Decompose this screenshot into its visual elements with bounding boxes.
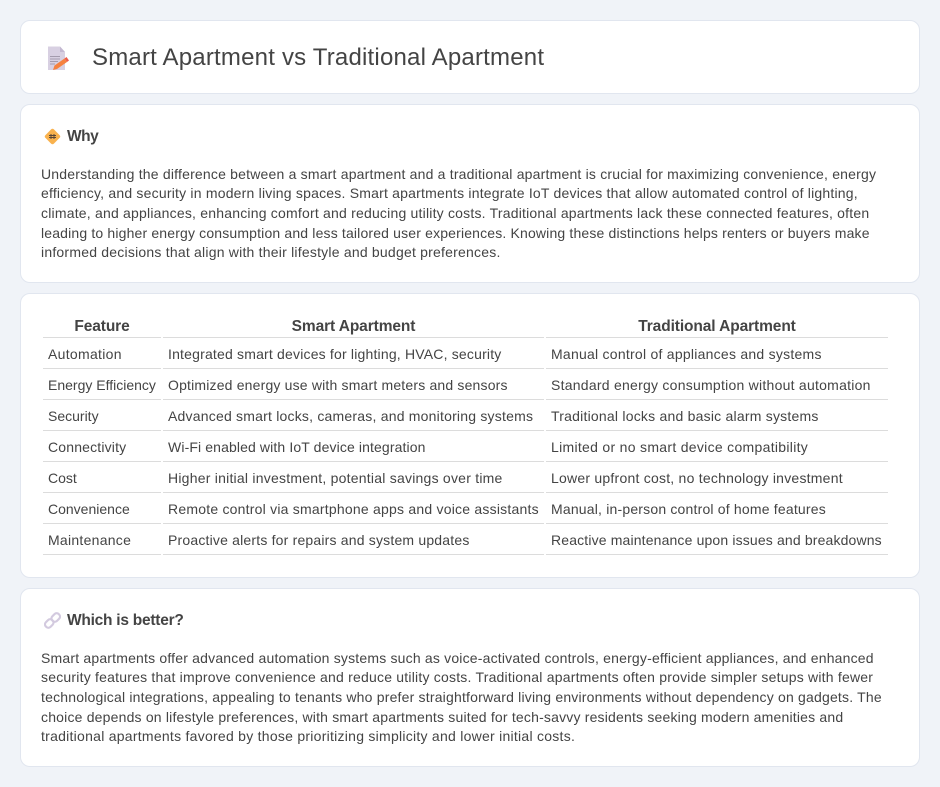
panel: comparison table	[20, 293, 920, 578]
panel: comparison table: Higher initial investment, potential savings over time	[168, 470, 503, 486]
icon: diamond sign	[44, 128, 60, 144]
heading: why: Why	[67, 128, 98, 145]
panel: why: leading to higher energy consumption and less tailored user experiences. Knowing these distinctions helps renters or buyers make	[41, 225, 870, 241]
panel: comparison table: Standard energy consumption without automation	[551, 377, 871, 393]
panel: comparison table: Traditional locks and basic alarm systems	[551, 408, 819, 424]
panel: why: climate, and appliances, enhancing comfort and reducing utility costs. Traditional apartments lack these connected features, often	[41, 205, 869, 221]
row: convenience	[43, 501, 888, 524]
panel: comparison table: Remote control via smartphone apps and voice assistants	[168, 501, 539, 517]
panel: comparison table: Reactive maintenance upon issues and breakdowns	[551, 532, 882, 548]
row: cost	[43, 470, 888, 493]
row: automation	[43, 346, 888, 369]
panel: comparison table: Wi-Fi enabled with IoT device integration	[168, 439, 426, 455]
panel: which is better	[20, 588, 920, 767]
icon: link	[44, 612, 61, 629]
table header	[43, 318, 888, 338]
panel: comparison table: Energy Efficiency	[48, 377, 156, 393]
panel: comparison table: Advanced smart locks, cameras, and monitoring systems	[168, 408, 533, 424]
panel: comparison table: Feature	[74, 318, 130, 335]
panel: comparison table: Traditional Apartment	[638, 318, 796, 335]
panel: comparison table: Cost	[48, 470, 77, 486]
panel: title	[20, 20, 920, 94]
icon: document with pencil	[48, 46, 69, 70]
panel: which is better: technological integrations, appealing to tenants who prefer straightforward living environments without dependency on gadgets. The	[41, 689, 882, 705]
heading: which is better: Which is better?	[67, 612, 184, 629]
heading: title: Smart Apartment vs Traditional Apartment	[92, 44, 544, 71]
panel: which is better: Smart apartments offer advanced automation systems such as voice-activated controls, energy-efficient appliances, and enhanced	[41, 650, 874, 666]
panel: which is better: security features that improve convenience and reduce utility costs. Traditional apartments often provide simpler setups with fewer	[41, 669, 873, 685]
panel: comparison table: Convenience	[48, 501, 130, 517]
panel: why: Understanding the difference between a smart apartment and a traditional apartment is crucial for maximizing convenience, energy	[41, 166, 876, 182]
row: maintenance	[43, 532, 888, 555]
panel: comparison table: Manual control of appliances and systems	[551, 346, 822, 362]
text: why paragraph	[41, 166, 876, 260]
panel: comparison table: Smart Apartment	[292, 318, 415, 335]
panel: why	[20, 104, 920, 283]
row: connectivity	[43, 439, 888, 462]
panel: comparison table: Lower upfront cost, no technology investment	[551, 470, 843, 486]
panel: comparison table: Maintenance	[48, 532, 131, 548]
panel: why: informed decisions that align with their lifestyle and budget preferences.	[41, 244, 501, 260]
panel: comparison table: Manual, in-person control of home features	[551, 501, 826, 517]
text: which is better paragraph	[41, 650, 882, 744]
panel: comparison table: Integrated smart devices for lighting, HVAC, security	[168, 346, 502, 362]
panel: why: efficiency, and security in modern living spaces. Smart apartments integrate IoT devices that allow automated control of lighting,	[41, 185, 858, 201]
row: energy efficiency	[43, 377, 888, 400]
panel: comparison table: Connectivity	[48, 439, 126, 455]
panel: comparison table: Limited or no smart device compatibility	[551, 439, 808, 455]
panel: which is better: traditional apartments favored by those prioritizing simplicity and lower initial costs.	[41, 728, 575, 744]
panel: comparison table: Security	[48, 408, 99, 424]
panel: comparison table: Automation	[48, 346, 122, 362]
panel: which is better: choice depends on lifestyle preferences, with smart apartments suited for tech-savvy residents seeking modern amenities and	[41, 709, 843, 725]
panel: comparison table: Optimized energy use with smart meters and sensors	[168, 377, 508, 393]
row: security	[43, 408, 888, 431]
panel: comparison table: Proactive alerts for repairs and system updates	[168, 532, 470, 548]
